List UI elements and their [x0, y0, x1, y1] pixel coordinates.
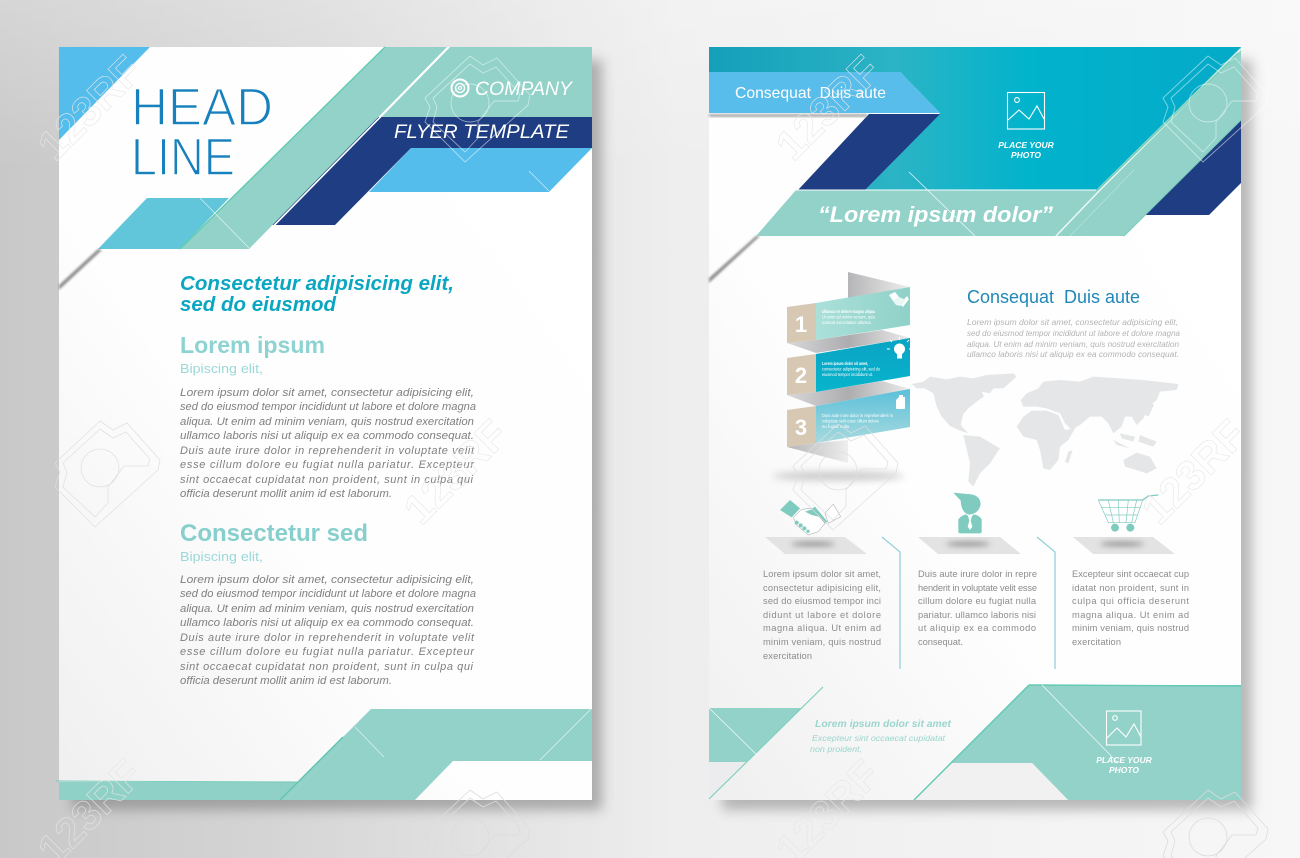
light blue band — [369, 148, 592, 192]
icon: business person — [953, 493, 982, 533]
column text 2 — [918, 569, 1037, 647]
watermark overlays: 123RF — [395, 411, 517, 533]
footer: mint strip — [59, 782, 298, 800]
photo placeholder caption bottom — [1096, 755, 1153, 775]
body text block 2: Lorem ipsum dolor sit amet, consectetur adipisicing elit, — [180, 574, 474, 586]
footer: right accents — [709, 685, 1241, 800]
body text block 1: sed do eiusmod tempor incididunt ut labore et dolore magna — [180, 401, 476, 413]
body text block 1: sint occaecat cupidatat non proident, sunt in culpa qui — [180, 474, 474, 486]
column text 1: sed do eiusmod tempor inci — [763, 596, 881, 606]
ribbon step 2 — [787, 337, 912, 395]
teal photo area — [709, 47, 1241, 190]
section paragraph: ullamco laboris nisi ut aliquip ex ea commodo consequat. — [967, 349, 1179, 359]
ribbon step 1: 1 — [795, 312, 807, 337]
section paragraph: aliqua. Ut enim ad minim veniam, quis nostrud exercitation — [967, 339, 1179, 349]
icon: photo placeholder top — [1008, 92, 1044, 129]
watermark overlays: 123RF — [1133, 411, 1255, 533]
ribbon step 3: eu fugiat nulla — [822, 424, 849, 429]
watermark overlays: 123RF — [29, 47, 151, 169]
company name: COMPANY — [475, 79, 573, 100]
ribbon step 2: Lorem ipsum dolor sit amet, — [822, 361, 868, 366]
column text 3: Excepteur sint occaecat cup — [1072, 569, 1189, 579]
page sheet — [59, 47, 592, 800]
column text 1: didunt ut labore et dolore — [763, 610, 881, 620]
section subheading: Bipiscing elit, — [180, 549, 263, 564]
subheading — [180, 273, 454, 316]
page sheet — [709, 47, 1241, 800]
ribbon step 1: Ullamco et dolore magna aliqua — [822, 309, 875, 314]
column text 1 — [763, 569, 881, 661]
column text 1: exercitation — [763, 651, 812, 661]
body text block 2: Duis aute irure dolor in reprehenderit in voluptate velit — [180, 632, 475, 644]
diagonal fold shadow — [709, 236, 760, 283]
body text block 2: aliqua. Ut enim ad minim veniam, quis nostrud exercitation — [180, 603, 474, 615]
photo placeholder caption top: PLACE YOUR — [998, 140, 1055, 150]
body text block 2: sed do eiusmod tempor incididunt ut labore et dolore magna — [180, 588, 476, 600]
ribbon step 2: 2 — [795, 363, 807, 388]
headline: HEAD — [131, 78, 273, 137]
ribbon folds — [787, 272, 910, 463]
headline: LINE — [131, 128, 235, 187]
ribbon step 3: 3 — [795, 415, 807, 440]
panel: left flyer page — [56, 47, 602, 810]
body text block 1: officia deserunt mollit anim id est laborum. — [180, 488, 392, 500]
icon: light bulb — [887, 337, 912, 358]
footer caption: non proident, — [810, 744, 862, 754]
column text 2: Duis aute irure dolor in repre — [918, 569, 1037, 579]
body text block 2: officia deserunt mollit anim id est laborum. — [180, 675, 392, 687]
diagonal fold shadow — [59, 249, 102, 290]
mint quote banner — [756, 47, 1241, 236]
column text 3: minim veniam, quis nostrud — [1072, 623, 1189, 633]
icon: photo placeholder bottom — [1106, 711, 1141, 745]
section heading: Lorem ipsum: Lorem ipsum — [180, 332, 325, 358]
navy diagonal — [266, 148, 411, 225]
icon: shopping cart — [1098, 495, 1158, 532]
column text 2: ut aliquip ex ea commodo — [918, 623, 1036, 633]
column text 3: idatat non proident, sunt in — [1072, 583, 1189, 593]
column text 2: henderit in voluptate velit esse — [918, 583, 1037, 593]
arrow banner: Consequat Duis aute — [735, 85, 886, 102]
body text block 2 — [180, 574, 476, 687]
footer: grey wedge — [914, 763, 1068, 800]
cyan parallelogram — [98, 198, 229, 249]
platforms under icons — [765, 537, 1175, 554]
ribbon step 3: voluptate velit esse cillum dolore — [822, 418, 879, 424]
ribbon infographic — [772, 272, 912, 480]
section paragraph: Lorem ipsum dolor sit amet, consectetur adipisicing elit, — [967, 317, 1178, 327]
ribbon shadow — [772, 472, 904, 480]
page drop shadow — [72, 60, 602, 810]
footer: left mint shape — [709, 708, 802, 762]
section paragraph: sed do eiusmod tempor incididunt ut labore et dolore magna — [967, 328, 1180, 338]
body text block 2: ullamco laboris nisi ut aliquip ex ea commodo consequat. — [180, 617, 474, 629]
photo placeholder caption bottom: PHOTO — [1109, 765, 1139, 775]
column text 3: culpa qui officia deserunt — [1072, 596, 1189, 606]
column text 2: pariatur. ullamco laboris nisi — [918, 610, 1036, 620]
footer caption — [810, 719, 952, 754]
ribbon step 1: nostrud exercitation ullamco — [822, 320, 871, 325]
page drop shadow — [722, 60, 1252, 810]
body text block 2: esse cillum dolore eu fugiat nulla pariatur. Excepteur — [180, 646, 475, 658]
section heading: Consectetur sed: Consectetur sed — [180, 520, 368, 547]
watermark overlays: 123RF — [767, 47, 889, 169]
footer: mint shape — [280, 709, 592, 800]
body text block 1: esse cillum dolore eu fugiat nulla pariatur. Excepteur — [180, 459, 475, 471]
icon: company logo — [452, 80, 468, 96]
mint quote banner: “Lorem ipsum dolor” — [818, 202, 1053, 227]
mint diagonal band — [180, 47, 549, 249]
ribbon step 2: consectetur adipisicing elit, sed do — [822, 366, 880, 372]
column text 3: exercitation — [1072, 637, 1121, 647]
column text 1: consectetur adipisicing elit, — [763, 583, 881, 593]
ribbon step 3: Duis aute irure dolor in reprehenderit in — [822, 413, 893, 418]
subheading: sed do eiusmod — [180, 294, 337, 316]
divider lines — [882, 537, 1055, 669]
body text block 1: aliqua. Ut enim ad minim veniam, quis nostrud exercitation — [180, 416, 474, 428]
subheading: Consectetur adipisicing elit, — [180, 273, 454, 295]
world map — [912, 373, 1178, 487]
flyer template label: FLYER TEMPLATE — [394, 121, 570, 143]
body text block 1 — [180, 387, 476, 500]
body text block 1: Lorem ipsum dolor sit amet, consectetur adipisicing elit, — [180, 387, 474, 399]
footer: right mint shape — [950, 685, 1241, 800]
section paragraph — [967, 317, 1180, 359]
corner blue triangle — [59, 47, 150, 140]
photo placeholder caption top: PHOTO — [1011, 150, 1041, 160]
mint corner panel — [381, 47, 592, 117]
footer caption: Excepteur sint occaecat cupidatat — [812, 733, 946, 743]
footer: grey corner — [709, 762, 746, 799]
navy diagonal — [798, 114, 940, 190]
icon: handshake — [780, 500, 841, 535]
body text block 2: sint occaecat cupidatat non proident, sunt in culpa qui — [180, 661, 474, 673]
icon: handshake small — [889, 292, 909, 307]
column text 3 — [1072, 569, 1189, 647]
arrow banner — [709, 72, 940, 113]
column text 1: Lorem ipsum dolor sit amet, — [763, 569, 881, 579]
body text block 1: Duis aute irure dolor in reprehenderit in voluptate velit — [180, 445, 475, 457]
column text 1: minim veniam, quis nostrud — [763, 637, 881, 647]
ribbon step 1 — [787, 287, 910, 343]
column text 1: magna aliqua. Ut enim ad — [763, 623, 881, 633]
column text 3: magna aliqua. Ut enim ad — [1072, 610, 1189, 620]
section subheading: Bipiscing elit, — [180, 361, 263, 376]
footer: accent lines — [56, 708, 592, 800]
ribbon step 1: Ut enim ad minim veniam, quis — [822, 314, 876, 320]
section heading: Consequat Duis aute — [967, 286, 1140, 307]
footer caption: Lorem ipsum dolor sit amet — [815, 719, 952, 730]
column text 2: cillum dolore eu fugiat nulla — [918, 596, 1037, 606]
footer: left diagonal accent — [709, 687, 823, 799]
photo placeholder caption top — [998, 140, 1055, 160]
panel: right flyer page — [709, 47, 1252, 810]
navy right corner — [1145, 120, 1241, 215]
navy band — [340, 117, 592, 148]
photo placeholder caption bottom: PLACE YOUR — [1096, 755, 1153, 765]
ribbon step 3 — [787, 389, 910, 447]
arrow shadow — [709, 114, 867, 117]
headline — [131, 78, 273, 187]
ribbon step 2: eiusmod tempor incididunt ut. — [822, 372, 873, 377]
icon: bottle — [896, 395, 905, 409]
body text block 1: ullamco laboris nisi ut aliquip ex ea commodo consequat. — [180, 430, 474, 442]
column text 2: consequat. — [918, 637, 963, 647]
